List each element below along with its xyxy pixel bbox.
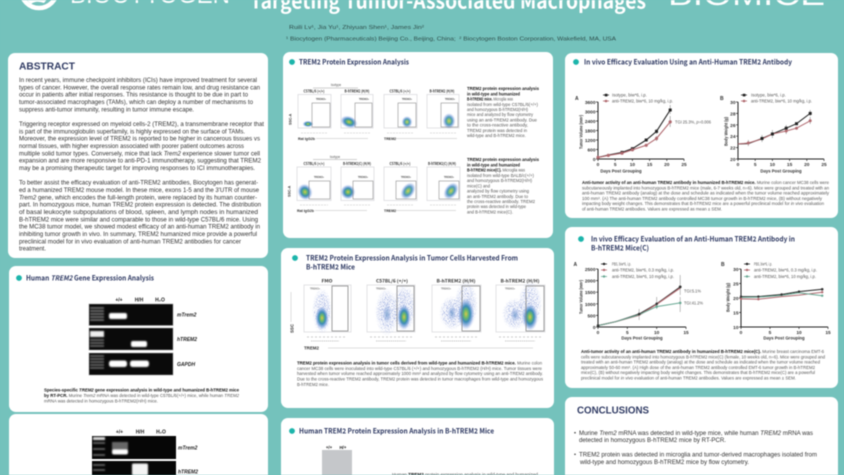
- chart A: tumor volume mice(C): PBS, biw*6, i.p.: [612, 262, 631, 266]
- conclusion bullets: TREM2 protein was detected in microglia and tumor-derived macrophages isolated from: [579, 452, 817, 459]
- blot image: [322, 445, 352, 475]
- gel image 2: [92, 430, 198, 475]
- blot image: H/+: [340, 445, 347, 450]
- chart A: tumor volume: 2400: [585, 119, 596, 125]
- heading: conclusions: CONCLUSIONS: [577, 406, 649, 417]
- chart B: body weight mice(C): 15: [825, 330, 831, 336]
- chart B: body weight: 24: [730, 134, 736, 140]
- gel image 2: mTrem2: [178, 446, 198, 452]
- chart B: body weight: 0: [737, 162, 740, 168]
- heading: human protein expression: Human TREM2 Protein Expression Analysis in B-hTREM2 Mice: [299, 426, 494, 436]
- chart B: body weight: 15: [787, 162, 793, 168]
- flow plots: microglia row 1: Isotype: [331, 83, 341, 87]
- chart B: body weight mice(C): 25: [733, 282, 739, 288]
- chart B: body weight: 5: [754, 162, 757, 168]
- chart A: tumor volume mice(C): 1000: [585, 302, 596, 308]
- in vivo mice(C) caption: mice(C), (B) without negatively impacting body weight changes. This demonstrates that B-hTREM2 mice(C) are a powerful: [581, 370, 815, 375]
- chart B: body weight mice(C): 10: [733, 325, 739, 331]
- abstract text: [19, 77, 264, 253]
- abstract text: types of cancer. However, the overall response rates remain low, and drug resistance can: [19, 84, 260, 91]
- chart A: tumor volume mice(C): 1500: [585, 290, 596, 296]
- chart B: body weight: 28: [730, 111, 736, 117]
- chart A: tumor volume: TGI 25.3%, p=0.006: [675, 120, 712, 124]
- icon: section dot: [289, 428, 295, 434]
- chart B: body weight mice(C): [721, 262, 831, 340]
- chart A: tumor volume: [575, 92, 712, 174]
- icon: section dot: [578, 236, 584, 242]
- chart B: body weight: [720, 92, 827, 174]
- gel image: H/H: [135, 298, 144, 304]
- abstract text: ed a humanized TREM2 mouse model. In these mice, exons 1-5 and the 3'UTR of mouse: [19, 187, 259, 194]
- conclusion bullets: wild-type and homozygous B-hTREM2 mice by flow cytometry.: [579, 459, 749, 466]
- flow plots: tumor cells: B-hTREM2 (H/H): [436, 278, 476, 284]
- chart B: body weight: anti-TREM2, biw*6, 10 mg/kg, i.p.: [751, 98, 812, 104]
- chart B: body weight mice(C): PBS, biw*6, i.p.: [754, 262, 772, 266]
- abstract text: may be a promising therapeutic target for improving responses to ICI immunotherapies.: [19, 165, 255, 172]
- conclusion bullets: detected in homozygous B-hTREM2 mice by RT-PCR.: [579, 437, 726, 444]
- flow plots: microglia row 1: B-hTREM2 (H/H): [344, 88, 370, 94]
- flow plots: microglia row 2: TREM2+: [358, 175, 369, 179]
- text: flow caption row 1: to the cross-reactive antibody,: [467, 123, 528, 128]
- text: flow caption row 2: analyzed by flow cytometry using: [467, 189, 530, 194]
- heading: in vivo efficacy: In vivo Efficacy Evaluation Using an Anti-Human TREM2 Antibody: [584, 57, 792, 67]
- gel image 2: H₂O: [156, 430, 166, 436]
- chart B: body weight mice(C): Days Post Grouping: [763, 336, 805, 340]
- icon: section dot: [292, 255, 298, 261]
- flow plots: microglia row 1: TREM2+: [316, 97, 327, 101]
- text: flow caption row 2: TREM2 protein expression analysis: [467, 157, 540, 162]
- in vivo mice(C) caption: cells were subcutaneously implanted into homozygous B-hTREM2 mice(C) (female, 10 weeks old, n=6). Mice were grouped and: [581, 354, 826, 360]
- chart A: tumor volume mice(C): [574, 262, 703, 340]
- flow plots: tumor cells: TREM2: [304, 346, 319, 350]
- abstract text: In recent years, immune checkpoint inhibitors (ICIs) have improved treatment for several: [19, 77, 258, 84]
- flow plots: tumor cells: TREM2+: [441, 286, 452, 290]
- chart B: body weight mice(C): 30: [733, 267, 739, 273]
- abstract text: Trem2 gene, which encodes the full-length protein, were replaced by its human counter-: [19, 194, 257, 201]
- flow plots: tumor cells: TREM2+: [310, 286, 321, 290]
- in vivo caption: of anti-human TREM2 antibodies. Values are expressed as mean ± SEM.: [582, 206, 722, 211]
- chart A: tumor volume mice(C): 2000: [585, 279, 596, 285]
- in vivo mice(C) caption: Anti-tumor activity of an anti-human TREM2 antibody in humanized B-hTREM2 mice(C). Murine breast carcinoma EMT-6: [581, 349, 825, 354]
- chart B: body weight: 25: [821, 162, 827, 168]
- chart A: tumor volume mice(C): 0: [593, 325, 596, 331]
- flow plots: microglia row 1: C57BL/6 (+/+): [304, 90, 325, 94]
- in vivo caption: impacting body weight changes. This demonstrates that B-hTREM2 mice are a powerful preclinical model for in vivo evaluation: [582, 201, 825, 206]
- panel: abstract: [8, 53, 268, 258]
- panel: tumor cell flow: B-hTREM2 Mice: [306, 262, 355, 272]
- heading: tumor cell expression: TREM2 Protein Expression Analysis in Tumor Cells Harvested From: [306, 253, 518, 263]
- text: flow caption row 2: protein was detected in wild-type: [467, 204, 527, 209]
- gel image: mTrem2: [177, 312, 197, 318]
- flow plots: microglia row 2: C57BL/6 (+/+): [390, 162, 411, 167]
- text: flow caption row 2: [467, 157, 540, 214]
- flow plots: tumor cells: TREM2+: [376, 286, 387, 290]
- flow plots: microglia row 1: [288, 83, 459, 141]
- flow plots: tumor cells: FMO: [322, 278, 333, 284]
- chart A: tumor volume mice(C): A: [574, 262, 578, 268]
- chart A: tumor volume mice(C): 5: [626, 330, 629, 336]
- flow plots: microglia row 1: SSC-A: [288, 113, 292, 125]
- gene expression caption: by RT-PCR. Murine Trem2 mRNA was detected in wild-type C57BL/6(+/+) mice, while human TREM2: [44, 393, 240, 398]
- flow plots: microglia row 2: Isotype: [330, 155, 340, 159]
- chart A: tumor volume: 5: [614, 162, 617, 168]
- chart A: tumor volume mice(C): 0: [597, 330, 600, 336]
- blot image: +/+: [326, 445, 333, 450]
- in vivo caption: subcutaneously implanted into homozygous B-hTREM2 mice (male, 6-7 weeks old, n=6). Mice were grouped and treated with an: [582, 185, 830, 190]
- in vivo mice(C) caption: [581, 349, 826, 380]
- text: flow caption row 2: in wild-type and humanized: [467, 162, 520, 167]
- heading: abstract: ABSTRACT: [19, 62, 75, 73]
- text: flow caption row 1: TREM2 protein expression analysis: [467, 86, 540, 91]
- chart A: tumor volume: 10: [630, 162, 635, 168]
- flow plots: microglia row 2: C57BL/6 (+/+): [304, 162, 325, 167]
- affiliations: ¹ Biocytogen (Pharmaceuticals) Beijing Co., Beijing, China; ² Biocytogen Boston Corporation, Wakefield, MA, USA: [286, 36, 617, 42]
- chart B: body weight mice(C): 10: [796, 330, 802, 336]
- conclusion bullets: Murine Trem2 mRNA was detected in wild-type mice, while human TREM2 mRNA was: [579, 430, 814, 437]
- chart A: tumor volume: 0: [593, 157, 596, 163]
- text: flow caption row 2: B-hTREM2 mice(C). Microglia was: [467, 168, 525, 173]
- flow plots: tumor cells: SSC: [290, 323, 294, 333]
- chart B: body weight mice(C): 0: [740, 330, 743, 336]
- chart B: body weight mice(C): 5: [769, 330, 772, 336]
- chart A: tumor volume mice(C): TGI:5.1%: [684, 288, 701, 294]
- in vivo caption: [582, 180, 830, 211]
- in vivo mice(C) caption: treated with an anti-human TREM2 antibody (analog) at the dose and schedule as indicated when the tumor volume reached: [581, 360, 821, 364]
- chart A: tumor volume mice(C): 500: [587, 313, 596, 319]
- tumor cell flow caption: cancer MC38 cells were inoculated into wild-type C57BL/6 (+/+) and homozygous B-hTREM2 (H/H) mice. Tumor tissues were: [297, 366, 543, 371]
- icon: section dot: [16, 275, 22, 281]
- flow plots: microglia row 2: B-hTREM2(C) (H/H): [428, 161, 456, 167]
- flow plots: microglia row 2: TREM2+: [444, 175, 455, 179]
- chart A: tumor volume: 15: [647, 162, 653, 168]
- flow plots: microglia row 2: SSC-A: [288, 185, 292, 197]
- flow plots: microglia row 1: TREM2: [384, 137, 396, 141]
- chart B: body weight: 20: [804, 162, 810, 168]
- chart B: body weight mice(C): anti-TREM2, biw*6, 10 mg/kg, i.p.: [754, 274, 816, 279]
- abstract text: multiple solid tumor types. Conversely, mice that lack Trem2 experience slower tumor cell: [19, 150, 261, 157]
- gene expression caption: [44, 388, 240, 404]
- abstract text: the MC38 tumor model, we showed modest efficacy of an anti-human TREM2 antibody in: [19, 224, 260, 231]
- gel image: [89, 298, 197, 375]
- chart A: tumor volume mice(C): anti-TREM2, biw*6, 10 mg/kg, i.p.: [612, 274, 674, 279]
- chart A: tumor volume: anti-TREM2, biw*6, 10 mg/kg, i.p.: [612, 98, 673, 104]
- chart A: tumor volume: 3600: [585, 100, 596, 106]
- flow plots: microglia row 2: [288, 155, 462, 213]
- text: flow caption row 1: B-hTREM2 mice. Microglia was: [467, 97, 513, 102]
- chart B: body weight: 22: [730, 146, 736, 152]
- abstract text: preclinical model for in vivo evaluation of anti-human TREM2 antibodies for cancer: [19, 238, 242, 245]
- gel image: +/+: [115, 298, 123, 304]
- flow plots: microglia row 2: Rat IgG2b: [297, 209, 315, 213]
- text: flow caption row 1: isolated from wild-type C57BL/6(+/+): [467, 102, 539, 107]
- abstract text: occur in patients after initial responses. This resistance is thought to be due in part to: [19, 92, 248, 99]
- text: flow caption row 1: [467, 86, 540, 138]
- panel: in vivo efficacy mice(C): B-hTREM2 Mice(C): [591, 243, 649, 253]
- heading: in vivo efficacy mice(C): In vivo Efficacy Evaluation of an Anti-Human TREM2 Antibody in: [591, 234, 795, 244]
- in vivo caption: Anti-tumor activity of an anti-human TREM2 antibody in humanized B-hTREM2 mice. Murine colon cancer MC38 cells were: [582, 180, 830, 185]
- flow plots: tumor cells: TREM2+: [505, 286, 516, 290]
- chart B: body weight: Body Weight (g): [724, 116, 728, 146]
- chart A: tumor volume: 3000: [585, 110, 596, 116]
- chart A: tumor volume: 1200: [585, 138, 596, 144]
- chart B: body weight mice(C): B: [721, 262, 725, 268]
- chart A: tumor volume: 0: [597, 162, 600, 168]
- gene expression caption: mRNA was detected in homozygous B-hTREM2(H/H) mice.: [44, 398, 158, 404]
- chart B: body weight: 20: [730, 157, 736, 163]
- panel: in vivo efficacy mice(C): [565, 227, 838, 388]
- panel: tumor cell flow: [281, 248, 554, 408]
- text: flow caption row 2: the cross-reactive antibody. TREM2: [467, 199, 536, 204]
- in vivo mice(C) caption: preclinical model for in vivo evaluation of anti-human TREM2 antibodies. Values are expressed as mean ± SEM.: [581, 376, 796, 380]
- chart A: tumor volume mice(C): TGI:41.2%: [684, 300, 703, 306]
- chart A: tumor volume: Tumor Volume (mm³): [578, 115, 584, 149]
- flow plots: tumor cells: [290, 278, 545, 350]
- chart A: tumor volume mice(C): Tumor Volume (mm³): [578, 280, 584, 314]
- chart B: body weight: 26: [730, 123, 736, 129]
- chart B: body weight: 30: [730, 100, 736, 106]
- abstract text: normal tissues, with higher expression associated with poorer patient outcomes across: [19, 143, 245, 150]
- chart B: body weight: B: [720, 96, 724, 102]
- icon: section dot: [573, 59, 579, 65]
- panel: second gene expression: [9, 414, 268, 475]
- chart B: body weight mice(C): 20: [733, 296, 739, 302]
- heading: gene expression: Human TREM2 Gene Expression Analysis: [26, 273, 154, 283]
- gel image 2: +/+: [116, 430, 123, 436]
- heading: protein expression: TREM2 Protein Expression Analysis: [299, 57, 409, 67]
- abstract text: is part of the immunoglobulin superfamily, is highly expressed on the surface of TAMs.: [19, 128, 245, 135]
- tumor cell flow caption: [297, 360, 543, 387]
- gene expression caption: Species-specific TREM2 gene expression analysis in wild-type and humanized B-hTREM2 mice: [44, 388, 240, 392]
- panel: human TREM2 gene expression: [9, 266, 268, 412]
- icon: section dot: [289, 59, 295, 65]
- chart B: body weight: Days Post Grouping: [760, 168, 802, 174]
- chart B: body weight: Isotype, biw*6, i.p.: [751, 92, 786, 98]
- chart B: body weight mice(C): anti-TREM2, biw*6, 0.3 mg/kg, i.p.: [754, 268, 817, 272]
- text: flow caption row 1: and homozygous B-hTREM2(H/H): [467, 107, 529, 112]
- tumor cell flow caption: TREM2 protein expression analysis in tumor cells derived from wild-type and humanized B-hTREM2 mice. Murine colon: [297, 360, 543, 366]
- chart A: tumor volume mice(C): 15: [683, 330, 689, 336]
- text: flow caption row 1: using an anti-TREM2 antibody. Due: [467, 117, 538, 122]
- flow plots: microglia row 2: B-hTREM2(C) (H/H): [343, 161, 371, 167]
- chart A: tumor volume mice(C): 10: [654, 330, 660, 336]
- abstract text: treatment.: [19, 246, 46, 253]
- flow plots: microglia row 1: C57BL/6 (+/+): [390, 90, 411, 94]
- chart B: body weight: 10: [770, 162, 775, 168]
- chart A: tumor volume: 600: [587, 148, 596, 154]
- in vivo caption: 100 mm³. (A) The anti-human TREM2 antibody controlled MC38 tumor growth in B-hTREM2 mice, (B) without negatively: [582, 196, 823, 201]
- text: flow caption row 1: TREM2 protein was detected in: [467, 128, 528, 133]
- chart B: body weight mice(C): Body Weight (g): [726, 282, 730, 312]
- gel image: GAPDH: [177, 362, 195, 368]
- abstract text: suppress anti-tumor immunity, resulting in tumor immune escape.: [19, 106, 194, 113]
- flow plots: microglia row 1: TREM2+: [359, 97, 370, 101]
- in vivo caption: anti-human TREM2 antibody (analog) at the dose and schedule as indicated when the tumor volume reached approximately: [582, 191, 830, 196]
- flow plots: microglia row 2: TREM2: [384, 209, 396, 213]
- abstract text: tumor-associated macrophages (TAMs), which can deploy a number of mechanisms to: [19, 99, 253, 106]
- abstract text: Moreover, the expression level of TREM2 is reported to be higher in cancerous tissues vs: [19, 136, 261, 143]
- chart A: tumor volume mice(C): 2500: [585, 267, 596, 273]
- tumor cell flow caption: B-hTREM2 mice.: [297, 382, 329, 387]
- flow plots: microglia row 1: TREM2+: [402, 97, 413, 101]
- text: flow caption row 2: isolated from wild-type BALB/c(+/+): [467, 173, 535, 178]
- text: flow caption row 2: and B-hTREM2 mice(C).: [467, 209, 513, 214]
- panel: in vivo efficacy: [565, 53, 838, 218]
- flow plots: microglia row 2: TREM2+: [314, 175, 325, 179]
- gel image 2: H/H: [136, 430, 145, 436]
- chart A: tumor volume mice(C): anti-TREM2, biw*6, 0.3 mg/kg, i.p.: [612, 268, 674, 272]
- abstract text: Triggering receptor expressed on myeloid cells-2 (TREM2), a transmembrane receptor that: [19, 121, 264, 128]
- text: flow caption row 1: in wild-type and humanized: [467, 91, 520, 96]
- chart A: tumor volume: 20: [664, 162, 670, 168]
- tumor cell flow caption: harvested when tumor volume reached approximately 1000 mm³ and analyzed by flow cytometry using an anti-TREM2 antibody.: [297, 371, 543, 376]
- chart A: tumor volume: Isotype, biw*6, i.p.: [612, 92, 647, 98]
- abstract text: part. In homozygous mice, human TREM2 protein expression is detected. The distribution: [19, 202, 261, 209]
- abstract text: of basal leukocyte subpopulations of blood, spleen, and lymph nodes in humanized: [19, 209, 258, 216]
- panel: conclusions: [565, 397, 838, 475]
- chart A: tumor volume: 25: [681, 162, 687, 168]
- text: flow caption row 1: mice and analyzed by flow cytometry: [467, 112, 534, 117]
- chart A: tumor volume mice(C): Days Post Grouping: [621, 336, 663, 340]
- tumor cell flow caption: Due to the cross-reactive TREM2 antibody, TREM2 protein was detected in tumor macrophages from wild-type and homozygous: [297, 376, 543, 382]
- flow plots: tumor cells: B-hTREM2 (H/H): [500, 278, 540, 284]
- flow plots: microglia row 1: TREM2+: [445, 97, 456, 101]
- authors: Ruili Lv¹, Jia Yu¹, Zhiyuan Shen¹, James Jin²: [289, 25, 424, 31]
- text: flow caption row 2: an anti-TREM2 antibody. Due to: [467, 194, 529, 199]
- flow plots: tumor cells: C57BL/6 (+/+): [376, 278, 408, 284]
- chart A: tumor volume: Days Post Grouping: [600, 168, 642, 174]
- text: flow caption row 1: wild-type and B-hTREM2 mice.: [467, 133, 526, 138]
- flow plots: microglia row 1: B-hTREM2 (H/H): [430, 88, 455, 94]
- chart A: tumor volume: A: [575, 96, 579, 102]
- abstract text: inhibiting tumor growth in vivo. In summary, TREM2 humanized mice provide a powerful: [19, 231, 258, 238]
- in vivo mice(C) caption: approximately 50-60 mm³. (A) High dose of the anti-human TREM2 antibody controlled EMT-6 tumor growth in B-hTREM2: [581, 365, 816, 370]
- flow plots: microglia row 1: Rat IgG2b: [298, 137, 316, 141]
- abstract text: expansion and are more responsive to anti-PD-1 immunotherapy, suggesting that TREM2: [19, 158, 261, 165]
- gel image: hTREM2: [177, 337, 197, 343]
- flow plots: microglia row 2: TREM2+: [401, 175, 412, 179]
- chart A: tumor volume: 1800: [585, 128, 596, 134]
- abstract text: B-hTREM2 mice were similar and comparable to those in wild-type C57BL/6 mice. Using: [19, 216, 258, 223]
- chart B: body weight mice(C): 15: [733, 310, 739, 316]
- conclusion bullets: [574, 430, 817, 475]
- gel image: H₂O: [155, 298, 165, 304]
- panel: TREM2 protein expression flow: [283, 52, 553, 238]
- text: flow caption row 2: and homozygous B-hTREM2(H/H): [467, 178, 533, 183]
- panel: human TREM2 protein western blot: [281, 418, 554, 475]
- abstract text: To better assist the efficacy evaluation of anti-TREM2 antibodies, Biocytogen has generat-: [19, 180, 258, 187]
- text: flow caption row 2: mice(C) and: [467, 183, 491, 188]
